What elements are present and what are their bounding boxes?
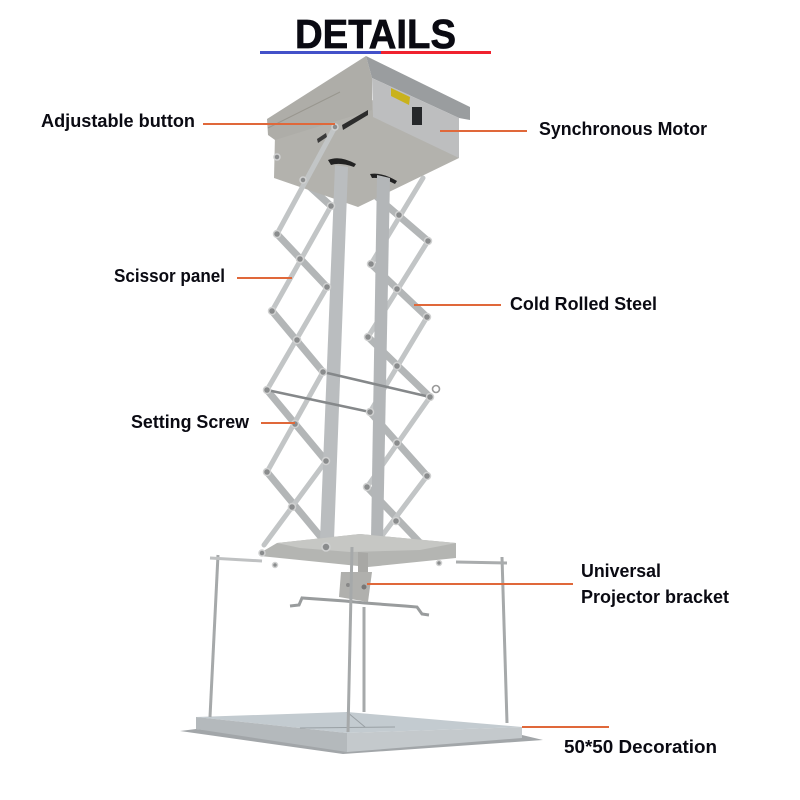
callout: Universal Projector bracket: Projector bracket xyxy=(581,586,729,607)
left scissor arms xyxy=(264,157,331,548)
callout: Setting Screw: Setting Screw xyxy=(131,411,250,432)
callout: Synchronous Motor: Synchronous Motor xyxy=(539,118,707,139)
callout: Cold Rolled Steel: Cold Rolled Steel xyxy=(510,293,657,314)
lower platform xyxy=(210,534,507,568)
motor housing xyxy=(267,56,470,207)
vertical rods and ceiling plate xyxy=(180,555,543,754)
front scissor strut xyxy=(277,127,335,234)
callout: Scissor panel: Scissor panel xyxy=(114,265,225,286)
title: DETAILS xyxy=(295,11,456,57)
support posts xyxy=(320,165,390,540)
callout: 50*50 Decoration: 50*50 Decoration xyxy=(564,736,717,757)
universal projector bracket xyxy=(290,547,429,732)
callout: Universal Projector bracket xyxy=(367,560,729,607)
right scissor arms xyxy=(367,178,430,548)
icon: projector lift illustration xyxy=(180,56,543,754)
callout: Universal Projector bracket: Universal xyxy=(581,560,661,581)
callout: Adjustable button: Adjustable button xyxy=(41,110,195,131)
pivot bolts xyxy=(264,124,434,524)
setting screw rods xyxy=(267,372,440,412)
